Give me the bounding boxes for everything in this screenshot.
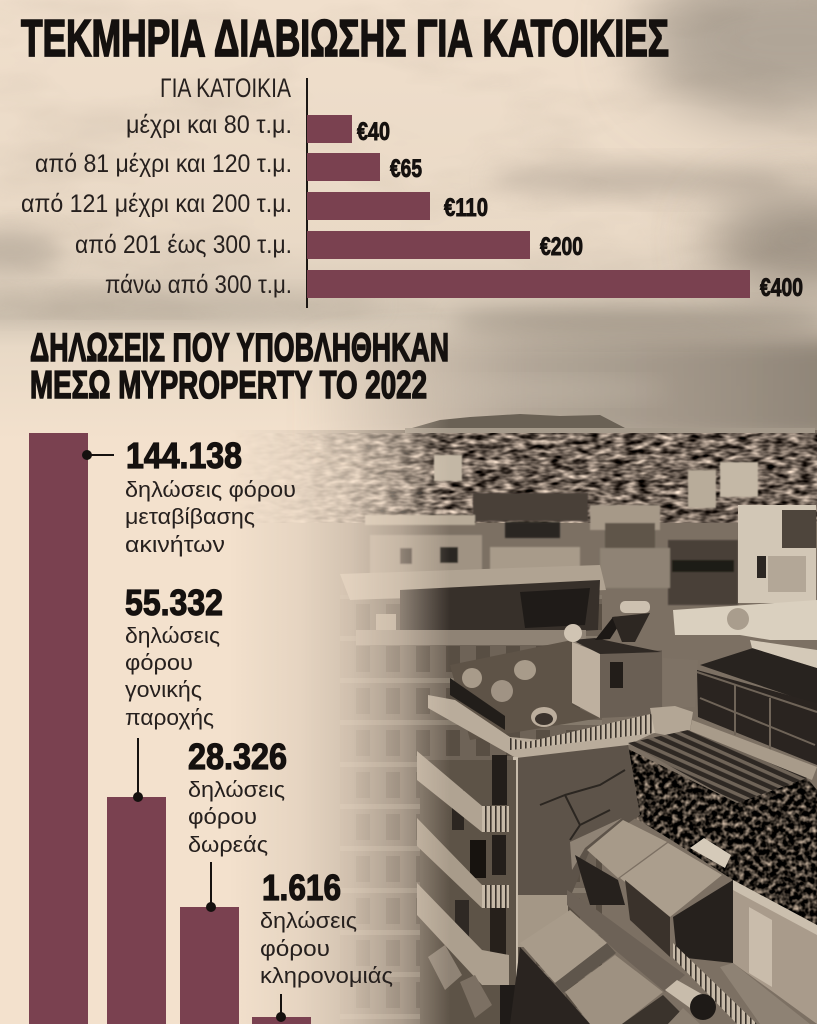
- row: up to 80 sqm: μέχρι και 80 τ.μ.: [126, 111, 292, 139]
- dark roof and pergola: [697, 640, 817, 765]
- large apartment building behind: [340, 565, 606, 1024]
- row: over 300 sqm: πάνω από 300 τ.μ.: [105, 271, 292, 299]
- white flat roof on the right: [673, 600, 817, 640]
- sign: [690, 838, 731, 868]
- row: 201 to 300 sqm: €200: [540, 233, 583, 261]
- row: 121 to 200 sqm: από 121 μέχρι και 200 τ.μ.: [21, 190, 292, 218]
- vegetation: [620, 745, 817, 930]
- bar: parental gift tax: δηλώσεις: [125, 623, 220, 648]
- rooftop dish bottom right: [665, 980, 716, 1020]
- bar: parental gift tax: [107, 582, 223, 1024]
- satellite dishes: [462, 608, 749, 727]
- row: 81 to 120 sqm: €65: [390, 155, 422, 183]
- distant mountains: [412, 414, 625, 428]
- row: 201 to 300 sqm: από 201 έως 300 τ.μ.: [75, 231, 292, 259]
- row: 201 to 300 sqm: [75, 231, 583, 261]
- heading: declarations: ΜΕΣΩ MYPROPERTY ΤΟ 2022: [30, 364, 427, 407]
- bar: donation tax: φόρου: [188, 804, 257, 829]
- penthouse: [572, 638, 662, 718]
- mid-distance buildings: [365, 455, 758, 605]
- bar: donation tax: [180, 736, 287, 1024]
- cracks on the wall: [540, 770, 625, 840]
- row: up to 80 sqm: [126, 111, 390, 146]
- axis: [306, 78, 308, 308]
- bar: inheritance tax: δηλώσεις: [260, 908, 357, 933]
- bar: property transfer tax: [29, 433, 296, 1024]
- row: over 300 sqm: [105, 270, 803, 302]
- bar chart: lifestyle presumptions: [21, 73, 803, 308]
- bar: inheritance tax: [252, 867, 393, 1024]
- dark terrace parapet: [450, 678, 505, 730]
- terrace wall right: [663, 658, 698, 707]
- bar: property transfer tax: ακινήτων: [125, 532, 225, 557]
- row: 121 to 200 sqm: [21, 190, 488, 222]
- bar: parental gift tax: παροχής: [125, 705, 214, 730]
- bar: donation tax: δηλώσεις: [188, 777, 285, 802]
- row: 81 to 120 sqm: [35, 150, 422, 183]
- bar: inheritance tax: 1.616: [262, 867, 341, 908]
- bar: property transfer tax: μεταβίβασης: [125, 504, 255, 529]
- bar chart: declarations: [29, 433, 393, 1024]
- white right edge: [817, 0, 820, 1024]
- lower awnings and walkway: [510, 890, 757, 1024]
- roof slab with railing: [428, 695, 655, 978]
- background: city photograph fading to the left: [230, 414, 820, 1024]
- vent box: [650, 706, 693, 735]
- rooftop terrace floor: [450, 640, 600, 740]
- white building upper right: [738, 505, 816, 603]
- bar: donation tax: δωρεάς: [188, 832, 268, 857]
- bar: parental gift tax: γονικής: [125, 677, 202, 702]
- bar: inheritance tax: φόρου: [260, 936, 330, 961]
- distant sea: [405, 428, 815, 433]
- courtyard wall with door: [720, 880, 817, 1024]
- bar: parental gift tax: 55.332: [125, 582, 223, 623]
- main building side wall: [518, 745, 640, 895]
- bar: parental gift tax: φόρου: [125, 650, 193, 675]
- bar: inheritance tax: κληρονομιάς: [260, 963, 393, 988]
- row: 121 to 200 sqm: €110: [444, 194, 488, 222]
- background: cloudy sky: [0, 0, 820, 445]
- upper awnings: [570, 818, 733, 963]
- solar water heater: [595, 601, 650, 642]
- far city texture: [230, 433, 820, 523]
- bar: donation tax: 28.326: [188, 736, 287, 777]
- corrugated roof: [628, 720, 817, 803]
- row: over 300 sqm: €400: [760, 274, 803, 302]
- bar: property transfer tax: 144.138: [126, 435, 242, 476]
- chart heading: ΓΙΑ ΚΑΤΟΙΚΙΑ: [160, 73, 291, 103]
- row: up to 80 sqm: €40: [357, 118, 390, 146]
- heading: declarations: ΔΗΛΩΣΕΙΣ ΠΟΥ ΥΠΟΒΛΗΘΗΚΑΝ: [30, 326, 449, 370]
- bar: property transfer tax: δηλώσεις φόρου: [125, 477, 296, 502]
- heading: declarations: [30, 326, 449, 407]
- row: 81 to 120 sqm: από 81 μέχρι και 120 τ.μ.: [35, 150, 292, 178]
- balcony column: [417, 751, 516, 1024]
